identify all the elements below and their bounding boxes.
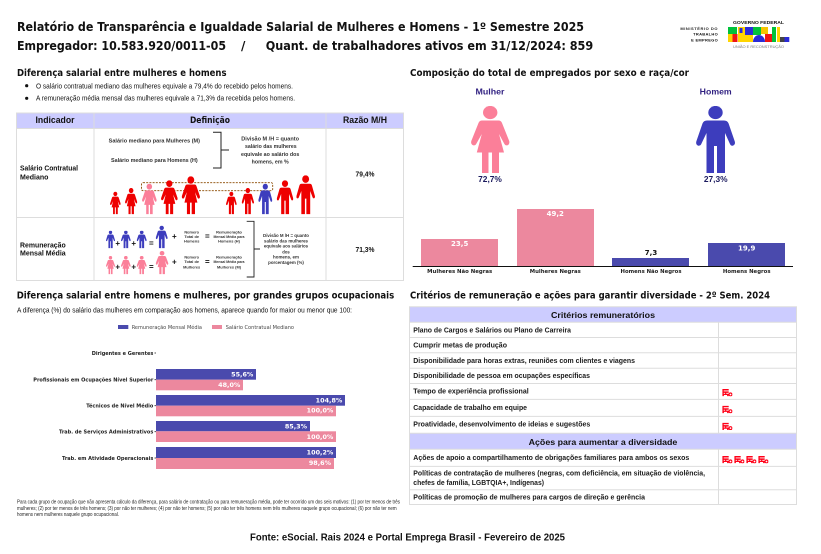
title — [17, 20, 593, 53]
heading: diferença salarial: Diferença salarial entre mulheres e homens — [17, 68, 227, 79]
icons: men ordered — [226, 175, 315, 214]
icons: men formula: + — [115, 239, 120, 248]
category labels: Homens Não Negros — [620, 269, 682, 275]
definition text: homens, em — [273, 255, 299, 260]
criteria list: Plano de Cargos e Salários ou Plano de Carreira — [413, 328, 571, 335]
actions list: Políticas de promoção de mulheres para cargos de direção e gerência — [413, 495, 645, 502]
bar chart: grupos ocupacionais — [33, 351, 345, 469]
formula text: mulheres: Mulheres (M) — [217, 264, 242, 269]
row: remuneração mensal média: Mensal Média — [20, 251, 66, 258]
panel: tabela de indicadores — [16, 113, 404, 280]
definition text: dos — [282, 249, 290, 254]
category labels: Homens Negros — [723, 269, 771, 275]
criteria list: Cumprir metas de produção — [413, 343, 507, 350]
icons: apoio a obrigações familiares — [722, 456, 768, 463]
formula text: mulheres: Total de — [184, 259, 200, 264]
footnote — [17, 500, 400, 518]
logo: ministério e governo federal: E EMPREGO — [691, 37, 718, 42]
pictogram: mulher — [471, 86, 509, 184]
criteria list: Disponibilidade para horas extras, reuniões com clientes e viagens — [413, 358, 635, 365]
footnote: homens nem mulheres naquele grupo ocupacional. — [17, 512, 119, 518]
bar: mulheres negras: 49,2 — [547, 210, 564, 218]
formula text: homens: Homens — [184, 238, 199, 243]
bar chart: sexo e raça/cor — [413, 209, 793, 275]
bar: homens não negros — [612, 249, 689, 266]
icons: men formula: = — [149, 239, 154, 248]
dashed highlight box — [142, 183, 273, 191]
logo: ministério e governo federal: TRABALHO — [693, 32, 718, 36]
actions list: Ações de apoio a compartilhamento de obrigações familiares para ambos os sexos — [413, 455, 689, 462]
definition text — [241, 137, 300, 166]
group: serviços administrativos — [59, 421, 336, 442]
bracket — [213, 132, 229, 168]
bullet list: O salário contratual mediano das mulheres equivale a 79,4% do recebido pelos homens. — [36, 81, 293, 90]
section header: ações: Ações para aumentar a diversidade — [529, 437, 678, 447]
group: atividade operacionais: Trab. em Atividade Operacionais — [62, 456, 153, 462]
footnote: Para cada grupo de ocupação que não apresenta cálculo da diferença, para salário de contratação ou para remuneração média, pode ter ocorrido um dos seis motivos: (1) por ter menos de três — [17, 500, 400, 506]
icons: women formula: + — [172, 258, 177, 266]
title: / — [241, 39, 246, 53]
source line: Fonte: eSocial. Rais 2024 e Portal Emprega Brasil - Fevereiro de 2025 — [250, 533, 565, 544]
definition text: equivale ao salário dos — [241, 152, 300, 158]
definition text: Divisão M /H = quanto — [241, 137, 299, 143]
logo: ministério e governo federal — [680, 20, 789, 49]
bullet list: A remuneração média mensal das mulheres equivale a 71,3% da recebida pelos homens. — [36, 94, 295, 103]
icons: men formula: + — [172, 232, 177, 241]
group: atividade operacionais — [62, 447, 336, 469]
icons: men formula: = — [205, 232, 210, 241]
bracket — [247, 221, 260, 277]
title: Empregador: 10.583.920/0011-05 — [17, 39, 226, 53]
legend — [118, 324, 294, 331]
category labels — [427, 269, 771, 275]
pictogram: mulher: 72,7% — [478, 174, 502, 184]
row: remuneração mensal média: 71,3% — [356, 245, 375, 254]
formula text: mulheres: Mulheres — [183, 264, 200, 269]
row: salário contratual mediano — [20, 132, 375, 214]
row: salário contratual mediano: Mediano — [20, 174, 48, 181]
table header: Definição — [190, 116, 230, 126]
pictogram: homem — [696, 86, 735, 184]
definition text: porcentagem (%) — [268, 260, 304, 265]
definition text — [263, 233, 309, 265]
definition text: equivale aos salários — [264, 244, 309, 248]
heading: critérios: Critérios de remuneração e ações para garantir diversidade - 2º Sem. 2024 — [410, 291, 770, 302]
logo: ministério e governo federal: UNIÃO E RECONSTRUÇÃO — [733, 44, 784, 49]
formula text: homens: Total de — [184, 234, 200, 239]
heading: grupos ocupacionais: Diferença salarial entre homens e mulheres, por grandes grupos ocupacionais — [17, 291, 395, 302]
subtitle: A diferença (%) do salário das mulheres em comparação aos homens, aparece quando for maior ou menor que 100: — [17, 305, 352, 314]
actions list — [413, 455, 705, 502]
pictogram: homem: Homem — [700, 86, 732, 96]
group: atividade operacionais: 100,2% — [307, 448, 334, 456]
criteria list: Tempo de experiência profissional — [413, 389, 529, 396]
section header: critérios remuneratórios: Critérios remuneratórios — [551, 310, 655, 320]
icon: capacidade de trabalho — [722, 406, 732, 413]
table header: Razão M/H — [343, 115, 387, 125]
row: remuneração mensal média — [20, 221, 375, 277]
criteria list: Capacidade de trabalho em equipe — [413, 405, 527, 412]
logo: ministério e governo federal: GOVERNO FEDERAL — [733, 20, 785, 25]
icons: women formula: = — [205, 258, 210, 266]
legend: Salário Contratual Mediano — [226, 324, 294, 331]
formula text: mulheres — [183, 255, 245, 269]
definition text: homens, em % — [252, 160, 289, 166]
group: serviços administrativos: Trab. de Serviços Administrativos — [59, 430, 153, 436]
definition text: salário das mulheres — [245, 144, 297, 150]
formula text: mulheres: Número — [184, 255, 200, 260]
icons: women formula — [106, 251, 210, 274]
pictogram: mulher: Mulher — [476, 86, 505, 96]
definition text: Divisão M /H = quanto — [263, 233, 309, 238]
bar: mulheres não negras: 23,5 — [451, 240, 468, 248]
group: dirigentes e gerentes: Dirigentes e Gerentes — [92, 351, 153, 357]
pictogram: homem: 27,3% — [704, 174, 728, 184]
icon: tempo de experiência — [722, 389, 732, 396]
footnote: mulheres; (2) por ter menos de três homens; (3) por não ter mulheres; (4) por não ter homens; (5) por não ter três homens nem três mulheres naquele grupo ocupacional; (6) por não ter nem — [17, 506, 397, 512]
icons: women ordered — [110, 176, 200, 214]
actions list: chefes de família, LGBTQIA+, Indígenas) — [413, 480, 544, 487]
formula text: homens: Mensal Média para — [214, 234, 245, 239]
logo: ministério e governo federal: MINISTÉRIO DO — [680, 26, 718, 31]
definition text: salário das mulheres — [264, 238, 309, 243]
icons: women formula: + — [131, 263, 136, 272]
actions list: Políticas de contratação de mulheres (negras, com deficiência, em situação de violência, — [413, 471, 705, 478]
row: remuneração mensal média: Remuneração — [20, 242, 66, 249]
group: atividade operacionais: 98,6% — [309, 459, 332, 467]
formula text: homens — [184, 230, 245, 244]
table header — [16, 113, 404, 128]
bar: homens não negros: 7,3 — [645, 249, 657, 257]
bar: homens negros: 19,9 — [738, 244, 755, 252]
criteria list — [413, 328, 635, 429]
bullet list — [25, 81, 295, 103]
group: profissionais: Profissionais em Ocupações Nível Superior — [33, 377, 154, 384]
formula text: homens: Homens (H) — [218, 239, 241, 244]
group: profissionais: 48,0% — [218, 381, 241, 389]
section header: ações — [410, 433, 796, 449]
group: técnicos: 104,8% — [316, 396, 343, 404]
icons: men formula — [106, 226, 210, 248]
formula text: mulheres: Remuneração — [216, 255, 242, 260]
group: técnicos — [86, 395, 345, 416]
bar: homens negros — [708, 243, 785, 266]
panel: critérios e ações — [410, 307, 796, 504]
group: serviços administrativos: 85,3% — [285, 422, 308, 430]
group: serviços administrativos: 100,0% — [307, 433, 334, 441]
icons: women formula: = — [149, 263, 154, 272]
icon: proatividade — [722, 423, 732, 430]
bar: mulheres não negras — [421, 239, 498, 266]
icons: women formula: + — [115, 263, 120, 272]
row: salário contratual mediano: 79,4% — [356, 170, 375, 178]
category labels: Mulheres Não Negras — [427, 269, 492, 275]
criteria list: Disponibilidade de pessoa em ocupações específicas — [413, 373, 590, 380]
section header: critérios remuneratórios — [410, 307, 796, 322]
formula text: homens: Número — [184, 230, 200, 235]
category labels: Mulheres Negras — [530, 269, 581, 275]
group: técnicos: Técnicos de Nível Médio — [86, 403, 154, 410]
heading: composição: Composição do total de empregados por sexo e raça/cor — [410, 68, 689, 79]
formula text: homens: Remuneração — [216, 230, 242, 235]
title: Relatório de Transparência e Igualdade Salarial de Mulheres e Homens - 1º Semestre 2025 — [17, 20, 584, 34]
group: técnicos: 100,0% — [307, 407, 334, 415]
row: salário contratual mediano: Salário mediano para Homens (H) — [111, 158, 198, 164]
formula text: mulheres: Mensal Média para — [214, 259, 245, 264]
group: profissionais — [33, 369, 256, 390]
bar: mulheres negras — [517, 209, 594, 266]
title: Quant. de trabalhadores ativos em 31/12/2024: 859 — [266, 39, 593, 53]
row: salário contratual mediano: Salário Contratual — [20, 165, 78, 172]
legend: Remuneração Mensal Média — [132, 324, 202, 331]
criteria list: Proatividade, desenvolvimento de ideias e sugestões — [413, 422, 590, 429]
icons: men formula: + — [131, 239, 136, 248]
group: profissionais: 55,6% — [231, 371, 254, 379]
row: salário contratual mediano: Salário mediano para Mulheres (M) — [109, 138, 200, 144]
table header: Indicador — [36, 115, 75, 125]
